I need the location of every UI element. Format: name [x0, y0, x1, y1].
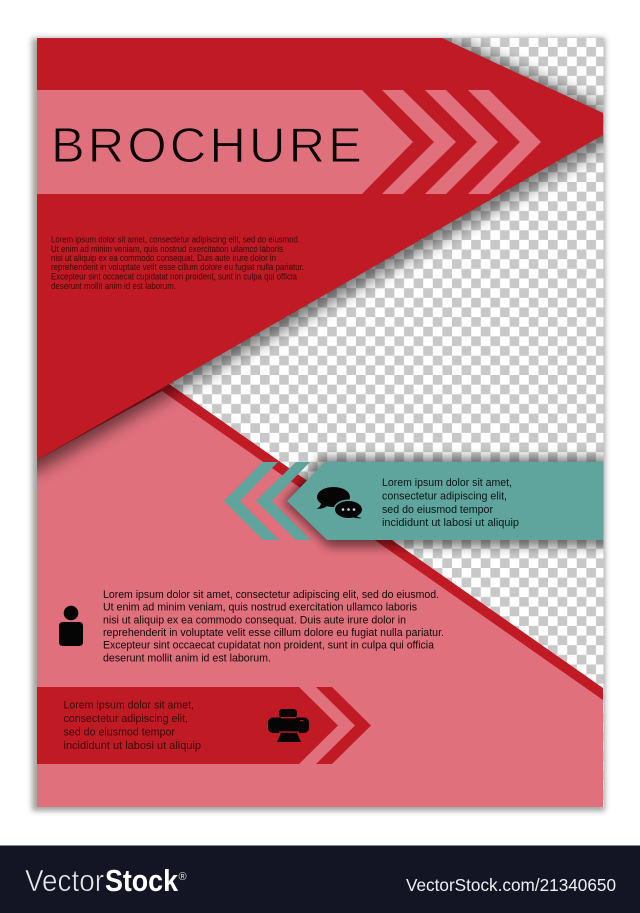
- icon: chat bubbles: [316, 487, 364, 520]
- callout text: [382, 477, 519, 529]
- title: BROCHURE: [51, 119, 365, 173]
- callout text: sed do eiusmod tempor: [382, 504, 493, 516]
- bottom band text: Lorem ipsum dolor sit amet,: [64, 700, 194, 712]
- bottom band text: sed do eiusmod tempor: [64, 726, 175, 738]
- middle paragraph: nisi ut aliquip ex ea commodo consequat. Duis aute irure dolor in: [103, 614, 406, 626]
- middle paragraph: deserunt mollit anim id est laborum.: [103, 652, 271, 664]
- top paragraph: deserunt mollit anim id est laborum.: [51, 281, 176, 291]
- middle paragraph: Lorem ipsum dolor sit amet, consectetur adipiscing elit, sed do eiusmod.: [103, 589, 439, 601]
- shadow of teal callout: [283, 457, 610, 547]
- top paragraph: nisi ut aliquip ex ea commodo consequat. Duis aute irure dolor in: [51, 253, 276, 263]
- callout: teal arrow: [287, 462, 604, 540]
- middle paragraph: reprehenderit in voluptate velit esse cillum dolore eu fugiat nulla pariatur.: [103, 627, 444, 639]
- icon: printer: [268, 709, 309, 742]
- teal chevrons: [224, 462, 311, 540]
- logo: VectorStock: Vector: [25, 863, 104, 898]
- lower panel: pink: [37, 391, 603, 807]
- bottom band text: consectetur adipiscing elit,: [64, 713, 188, 725]
- bottom band text: [64, 700, 201, 752]
- icon: person: [59, 606, 83, 646]
- top paragraph: Lorem ipsum dolor sit amet, consectetur adipiscing elit, sed do eiusmod.: [51, 235, 300, 245]
- top paragraph: Excepteur sint occaecat cupidatat non proident, sunt in culpa qui officia: [51, 271, 297, 281]
- bottom band: red arrow: [37, 687, 338, 764]
- logo: VectorStock: ®: [178, 871, 187, 883]
- footer bar: [0, 845, 640, 913]
- page with transparency checker background: [20, 30, 612, 807]
- middle paragraph: Ut enim ad minim veniam, quis nostrud exercitation ullamco laboris: [103, 602, 417, 614]
- top paragraph: Ut enim ad minim veniam, quis nostrud exercitation ullamco laboris: [51, 244, 284, 254]
- shadow of the top red arrow: [20, 30, 612, 472]
- top panel: red arrow: [37, 38, 603, 460]
- footer image id: VectorStock.com/21340650: [406, 875, 616, 895]
- bottom band text: incididunt ut labosi ut aliquip: [64, 740, 201, 752]
- callout text: consectetur adipiscing elit,: [382, 490, 507, 502]
- bottom band chevron: [316, 687, 371, 764]
- page drop shadow: [32, 38, 605, 811]
- callout text: Lorem ipsum dolor sit amet,: [382, 477, 512, 489]
- logo: VectorStock: Stock: [105, 863, 179, 898]
- top paragraph: reprehenderit in voluptate velit esse cillum dolore eu fugiat nulla pariatur.: [51, 262, 304, 272]
- title band: pink arrow: [37, 90, 413, 194]
- logo: VectorStock: [25, 863, 187, 898]
- top paragraph: [51, 235, 304, 291]
- lower stripe: dark red: [37, 384, 603, 700]
- middle paragraph: [103, 589, 444, 664]
- middle paragraph: Excepteur sint occaecat cupidatat non proident, sunt in culpa qui officia: [103, 640, 434, 652]
- callout text: incididunt ut labosi ut aliquip: [382, 517, 519, 529]
- chevrons on title band: [382, 90, 541, 194]
